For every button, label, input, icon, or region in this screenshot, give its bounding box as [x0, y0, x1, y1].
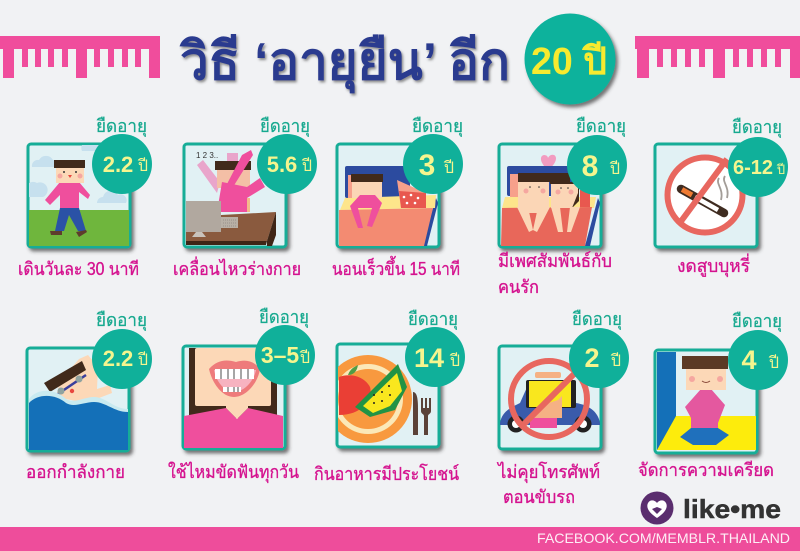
caption second line: คนรัก	[498, 277, 539, 297]
illustration: phone in car prohibited	[499, 346, 601, 449]
heading: extends life: ยืดอายุ	[408, 309, 458, 330]
badge: 14 years	[405, 327, 465, 387]
caption: กินอาหารมีประโยชน์	[314, 463, 459, 484]
illustration: walking person	[25, 141, 131, 248]
logo: like me	[640, 492, 781, 524]
badge: 2.2 years: 2.2	[103, 152, 133, 177]
panel: intimacy	[498, 116, 627, 297]
badge: 2 years: ปี	[611, 352, 621, 370]
badge: 8 years: 8	[582, 150, 598, 183]
badge: 2.2 years: ปี	[138, 351, 148, 369]
footer bar	[0, 527, 800, 551]
badge: 3-5 years: ปี	[300, 349, 310, 367]
illustration: swimmer	[27, 348, 129, 451]
illustration: office stretching: 1 2 3..	[196, 151, 218, 160]
illustration: plate of fruit	[324, 344, 439, 447]
heading: extends life: ยืดอายุ	[260, 116, 310, 137]
left ruler decoration	[0, 36, 160, 78]
badge: 2.2 years	[92, 134, 152, 194]
heading: extends life: ยืดอายุ	[412, 116, 463, 137]
illustration: smile with teeth	[183, 346, 285, 449]
heading: extends life: ยืดอายุ	[572, 309, 622, 330]
caption: ออกกำลังกาย	[26, 462, 125, 482]
panel: exercise	[26, 310, 152, 482]
caption: ไม่คุยโทรศัพท์	[496, 461, 600, 483]
badge: 3-5 years	[255, 325, 315, 385]
panel: healthy food	[314, 309, 465, 484]
panel: no phone while driving	[496, 309, 629, 507]
heading: extends life: ยืดอายุ	[96, 116, 147, 137]
caption: เดินวันละ 30 นาที	[18, 259, 139, 279]
badge: 8 years	[567, 135, 627, 195]
badge: 14 years: 14	[414, 343, 444, 373]
badge: 3 years: 3	[419, 149, 435, 182]
badge: 2 years: 2	[584, 343, 600, 373]
badge: 5.6 years: ปี	[302, 157, 312, 175]
badge: 6-12 years: 6-12	[733, 157, 773, 179]
illustration: meditating person	[655, 350, 757, 453]
badge: 5.6 years: 5.6	[267, 152, 297, 177]
illustration: no smoking sign	[655, 144, 757, 247]
caption: นอนเร็วขึ้น 15 นาที	[332, 256, 460, 279]
footer text: FACEBOOK.COM/MEMBLR.THAILAND	[537, 530, 790, 546]
title: วิธี ‘อายุยืน’ อีก	[179, 33, 510, 94]
logo: like me: like•me	[683, 494, 781, 524]
heading: extends life: ยืดอายุ	[259, 307, 309, 328]
badge: 3-5 years: 3–5	[261, 342, 299, 368]
heading: extends life: ยืดอายุ	[96, 310, 147, 331]
badge: 4 years	[728, 330, 788, 390]
heading: extends life: ยืดอายุ	[732, 117, 782, 138]
panel: flossing	[168, 307, 315, 483]
badge: 2.2 years: 2.2	[103, 346, 133, 371]
caption: เคลื่อนไหวร่างกาย	[173, 256, 301, 279]
badge: 4 years: 4	[741, 345, 757, 375]
badge: 2 years	[569, 328, 629, 388]
panel: moving the body	[173, 116, 317, 279]
title badge: 20 years: 20 ปี	[531, 41, 607, 83]
badge: 2.2 years	[92, 329, 152, 389]
caption second line: ตอนขับรถ	[503, 487, 575, 507]
badge: 4 years: ปี	[769, 354, 779, 372]
badge: 14 years: ปี	[450, 352, 460, 370]
badge: 3 years: ปี	[444, 159, 454, 177]
badge: 6-12 years	[728, 137, 788, 197]
badge: 8 years: ปี	[610, 160, 620, 178]
panel: stress management	[638, 311, 788, 480]
right ruler decoration	[635, 36, 800, 78]
heading: extends life: ยืดอายุ	[732, 311, 782, 332]
caption: มีเพศสัมพันธ์กับ	[498, 251, 612, 271]
illustration: person in bed	[337, 144, 439, 247]
title badge: 20 years	[524, 14, 616, 104]
badge: 2.2 years: ปี	[138, 157, 148, 175]
caption: ใช้ไหมขัดฟันทุกวัน	[168, 461, 299, 483]
panel: walking	[18, 116, 152, 279]
illustration: office stretching	[184, 144, 286, 247]
caption: งดสูบบุหรี่	[677, 253, 750, 277]
heading: extends life: ยืดอายุ	[576, 116, 626, 137]
badge: 6-12 years: ปี	[776, 162, 785, 177]
panel: quit smoking	[655, 117, 788, 277]
caption: จัดการความเครียด	[638, 460, 774, 480]
badge: 5.6 years	[257, 134, 317, 194]
badge: 3 years	[403, 134, 463, 194]
illustration: couple in bed	[499, 144, 601, 247]
panel: sleeping earlier	[332, 116, 463, 279]
